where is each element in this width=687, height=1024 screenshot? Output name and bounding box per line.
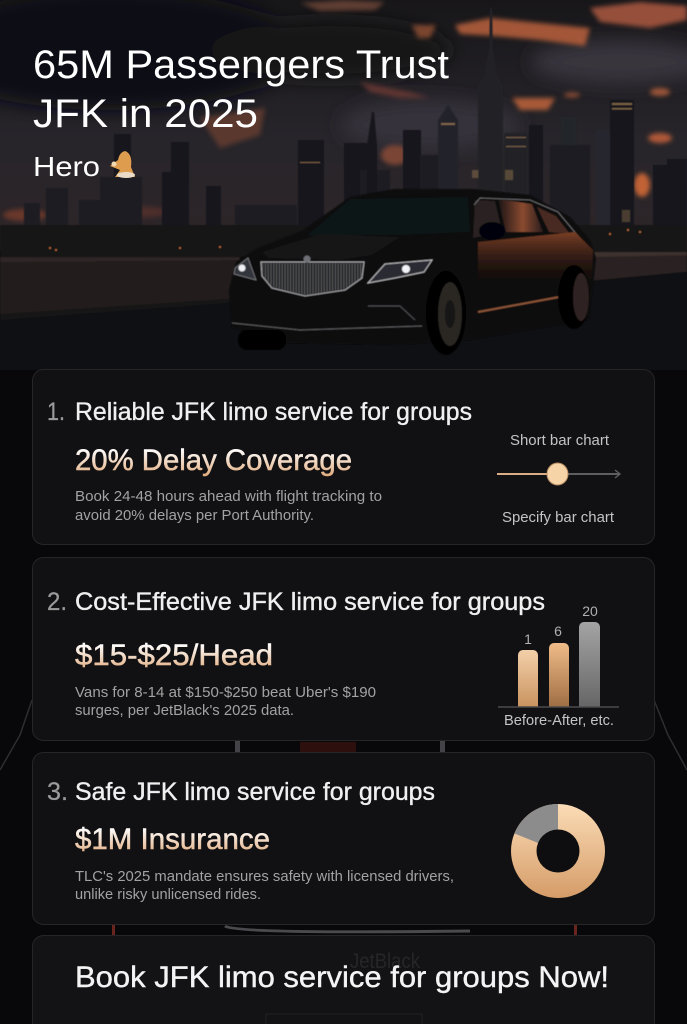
description 2: surges, per JetBlack's 2025 data. [75, 702, 294, 719]
panel 2: cost-effective service [32, 558, 654, 740]
heading 3: Safe JFK limo service for groups [75, 778, 435, 806]
panel 3: safe service [32, 752, 654, 924]
faint badge outline [266, 1014, 422, 1024]
orange body reflection [478, 232, 593, 292]
description 2: Vans for 8-14 at $150-$250 beat Uber's $190 [75, 684, 376, 701]
hood highlight [262, 234, 400, 260]
stat: 20% delay coverage: 20% Delay Coverage [75, 444, 352, 477]
title: 65M Passengers Trust [33, 43, 449, 87]
side mirror [479, 222, 505, 240]
windshield [306, 197, 470, 236]
description 1 [75, 488, 382, 524]
title: JFK in 2025 [33, 92, 258, 136]
description 3 [75, 868, 454, 903]
donut chart [511, 804, 605, 898]
slider chart: Short bar chart [510, 433, 609, 449]
sky with sunset clouds [0, 0, 687, 250]
bar chart [498, 603, 619, 729]
bar chart: Before-After, etc. [504, 713, 614, 729]
dashboard background behind the cards [0, 370, 687, 1024]
stat: insurance: $1M Insurance [75, 823, 270, 856]
grille [261, 262, 364, 296]
front wheel [426, 271, 466, 355]
heading 1: 1. [47, 398, 65, 426]
heading 2: Cost-Effective JFK limo service for groups [75, 588, 545, 616]
call to action text: Book JFK limo service for groups Now! [75, 961, 609, 994]
chrome window line [474, 198, 578, 236]
faint JetBlack watermark: JetBlack [350, 950, 420, 973]
right headlight [368, 260, 432, 283]
hero subtitle with icon [33, 151, 135, 182]
city skyline [0, 8, 687, 257]
rear wheel [558, 265, 590, 329]
panel 1: reliable service [32, 370, 654, 544]
stat: cost per head: $15-$25/Head [75, 639, 273, 672]
description 3: unlike risky unlicensed rides. [75, 886, 261, 903]
near front tyre [238, 330, 286, 350]
left headlight [234, 258, 256, 280]
description 3: TLC's 2025 mandate ensures safety with licensed drivers, [75, 868, 454, 885]
hero subtitle with icon: Hero [33, 151, 100, 182]
lit windows [300, 103, 632, 222]
roadside barrier [0, 252, 687, 322]
bar chart: 1 [524, 631, 532, 647]
slider chart: Specify bar chart [502, 510, 614, 526]
side windows [473, 199, 570, 238]
description 1: Book 24-48 hours ahead with flight tracking to [75, 488, 382, 505]
panel 4: call to action [32, 936, 654, 1024]
heading 3: 3. [47, 778, 68, 806]
road [0, 272, 687, 370]
heading 2: 2. [47, 588, 67, 616]
slider chart [497, 433, 620, 526]
grille emblem [304, 256, 310, 262]
title [33, 43, 449, 136]
description 1: avoid 20% delays per Port Authority. [75, 507, 314, 524]
limousine [229, 189, 596, 355]
bar chart: 20 [582, 603, 598, 619]
bar chart: 6 [554, 623, 562, 639]
description 2 [75, 684, 376, 719]
car body [229, 189, 596, 345]
lower bumper chrome [232, 323, 422, 330]
hero photo: skyline and limousine [0, 0, 687, 370]
icon: gold figure [110, 151, 135, 178]
heading 1: Reliable JFK limo service for groups [75, 398, 472, 426]
